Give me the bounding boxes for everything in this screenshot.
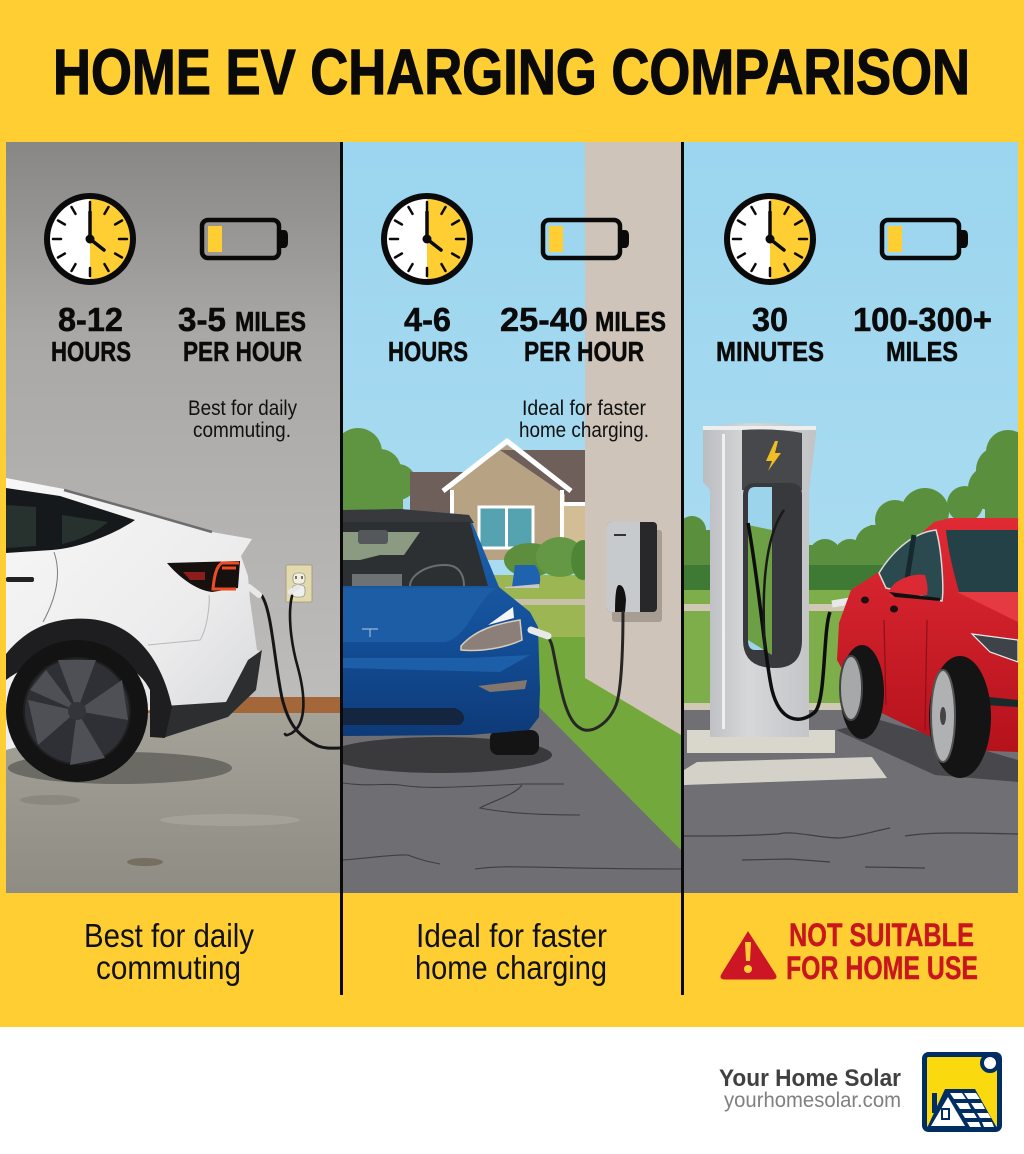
- EV plug and cable: [531, 612, 623, 730]
- footer brand text: yourhomesolar.com: [724, 1089, 901, 1112]
- side windows: [6, 488, 135, 553]
- icon: battery: [882, 220, 968, 258]
- garage floor: [6, 713, 340, 893]
- lawn: [684, 590, 851, 710]
- range added: 100-300+: [853, 301, 992, 338]
- note: [519, 397, 649, 442]
- range added: 3-5: [178, 301, 226, 338]
- grass strip: [535, 637, 681, 850]
- caption: level 2: [415, 917, 607, 986]
- rear wheel: [840, 645, 884, 739]
- lawn and shrubs: [494, 537, 585, 637]
- note: Best for daily: [188, 397, 297, 420]
- charge time: HOURS: [51, 336, 131, 367]
- grille: [343, 708, 464, 725]
- trees: [684, 430, 1018, 565]
- caption: not suitable warning: NOT SUITABLE: [789, 917, 974, 953]
- charge time: 8-12: [58, 301, 123, 338]
- range added: [500, 301, 666, 367]
- darker tree band: [684, 565, 884, 592]
- windshield: [343, 522, 488, 586]
- note: home charging.: [519, 419, 649, 442]
- caption: level 2: home charging: [415, 949, 607, 986]
- mirror: [512, 565, 540, 587]
- panel: level 1 garage outlet scene: [6, 142, 342, 893]
- range added: [853, 301, 992, 367]
- wall charger: [607, 522, 662, 622]
- panel: level 2 driveway scene: [328, 142, 681, 893]
- hood highlight: [343, 595, 486, 642]
- charge time: 4-6: [404, 301, 451, 338]
- footer brand text: Your Home Solar: [719, 1065, 901, 1092]
- rear wheel: [6, 640, 148, 782]
- range added: MILES: [595, 306, 666, 337]
- headlight: [461, 620, 522, 651]
- headlight: [972, 634, 1018, 662]
- parking lot: [684, 710, 1018, 893]
- car shadow: [836, 720, 1018, 782]
- lightning bolt: [766, 441, 781, 471]
- caption: not suitable warning: [721, 917, 978, 986]
- baseboard: [148, 697, 340, 713]
- note: Ideal for faster: [522, 397, 646, 420]
- roof line: [64, 490, 212, 532]
- red car: [837, 518, 1018, 778]
- range added: PER HOUR: [183, 336, 302, 367]
- note: commuting.: [193, 419, 291, 442]
- charge time: MINUTES: [716, 336, 824, 367]
- charge time: [716, 301, 824, 367]
- dividers: [342, 142, 682, 995]
- stats: level 2: [384, 196, 666, 442]
- sky: [343, 142, 585, 575]
- logo: solar house: [924, 1054, 1000, 1130]
- door seam: [43, 552, 57, 622]
- range added: MILES: [235, 306, 306, 337]
- icon: warning triangle: [721, 932, 776, 979]
- windows: [879, 530, 943, 601]
- fog light: [478, 680, 527, 692]
- charge time: [388, 301, 468, 367]
- background tree: [343, 428, 413, 510]
- windshield: [946, 530, 1018, 592]
- note: [188, 397, 297, 442]
- range added: PER HOUR: [524, 336, 644, 367]
- icon: clock: [47, 196, 133, 282]
- front wheel: [929, 656, 991, 778]
- icon: clock: [384, 196, 470, 282]
- caption: level 1: Best for daily: [84, 917, 254, 954]
- range added: [178, 301, 306, 367]
- footer brand text: [719, 1065, 901, 1112]
- house: [410, 441, 585, 560]
- charging cable: [249, 587, 342, 748]
- wheel arch: [6, 619, 172, 738]
- charging station: [684, 423, 887, 785]
- hood badge: [362, 629, 378, 637]
- icon: battery: [543, 220, 629, 258]
- cable bay: [743, 483, 802, 668]
- charge time: [51, 301, 131, 367]
- mirror: [889, 575, 928, 597]
- icon: clock: [727, 196, 813, 282]
- caption: level 1: commuting: [96, 949, 241, 986]
- stats: dc fast: [716, 196, 992, 367]
- power outlet: [286, 565, 312, 602]
- driveway: [343, 707, 681, 893]
- panel: dc fast charging scene: [678, 142, 1024, 893]
- tail light: [167, 561, 240, 592]
- stats: level 1: [47, 196, 306, 442]
- door handles and seam: [861, 596, 869, 604]
- range added: MILES: [886, 336, 958, 367]
- range added: 25-40: [500, 301, 588, 338]
- cable: [748, 523, 830, 719]
- white car: [6, 478, 262, 782]
- sky: [684, 142, 1018, 545]
- bumper vent: [979, 696, 1018, 707]
- caption: level 1: [84, 917, 254, 986]
- concrete wall: [585, 142, 681, 735]
- icon: battery: [202, 220, 288, 258]
- caption: level 2: Ideal for faster: [416, 917, 607, 954]
- rear bumper: [158, 650, 262, 737]
- display head: [742, 429, 802, 490]
- charge time: HOURS: [388, 336, 468, 367]
- charge time: 30: [752, 301, 788, 338]
- garage wall: [6, 142, 340, 698]
- door handle: [6, 577, 34, 582]
- blue car: [328, 509, 552, 773]
